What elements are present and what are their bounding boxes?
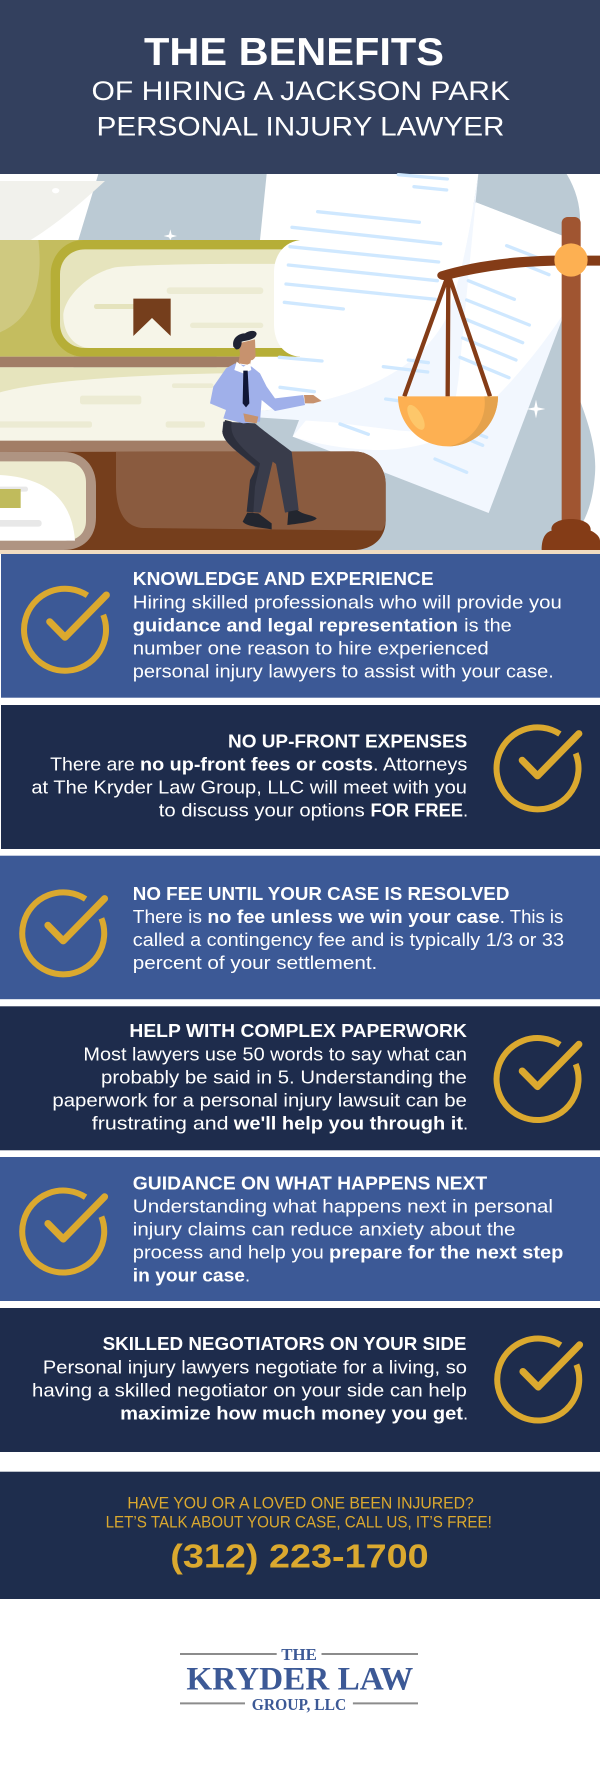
body text <box>133 906 564 973</box>
body text: in your case <box>133 1264 245 1285</box>
body text: is the <box>464 614 512 635</box>
body text: number one reason to hire experienced <box>133 637 489 658</box>
logo: The Kryder Law Group, LLC: THE <box>281 1645 317 1664</box>
body text: prepare for the next step <box>329 1241 563 1262</box>
body text: Personal injury lawyers negotiate for a living, so <box>43 1356 467 1377</box>
body text: probably be said in 5. Understanding the <box>101 1066 467 1087</box>
logo: The Kryder Law Group, LLC: KRYDER LAW <box>186 1661 413 1697</box>
title: OF HIRING A JACKSON PARK <box>92 76 510 106</box>
call to action panel <box>0 1472 600 1599</box>
document pages <box>217 174 567 513</box>
body text: having a skilled negotiator on your side can help <box>32 1379 467 1400</box>
title <box>92 31 510 142</box>
panel: help with complex paperwork <box>0 1006 600 1150</box>
body text: Understanding what happens next in personal <box>133 1195 553 1216</box>
heading: KNOWLEDGE AND EXPERIENCE <box>133 568 434 589</box>
body text <box>31 753 468 820</box>
heading: NO UP-FRONT EXPENSES <box>228 730 467 751</box>
icon: check circle <box>24 589 106 671</box>
body text: to discuss your options <box>159 799 365 820</box>
icon: check circle <box>497 727 579 809</box>
body text: called a contingency fee and is typically 1/3 or 33 <box>133 929 564 950</box>
phone number: (312) 223-1700 <box>170 1538 429 1575</box>
body text: . <box>463 1112 468 1133</box>
panel: skilled negotiators <box>0 1308 600 1452</box>
icon: check circle <box>22 1191 105 1273</box>
call to action text <box>106 1495 492 1532</box>
title: PERSONAL INJURY LAWYER <box>96 112 504 142</box>
body text: we'll help you through it <box>233 1112 463 1133</box>
icon: check circle <box>497 1339 580 1421</box>
top book <box>0 240 333 357</box>
body text: paperwork for a personal injury lawsuit can be <box>52 1089 467 1110</box>
middle book <box>0 357 267 452</box>
body text: There is <box>133 906 202 927</box>
body text: There are <box>50 753 135 774</box>
panel: no fee until resolved <box>0 856 600 999</box>
bottom book <box>0 451 386 550</box>
body text <box>52 1043 468 1133</box>
logo: The Kryder Law Group, LLC <box>180 1645 418 1714</box>
body text: . <box>245 1264 250 1285</box>
heading: NO FEE UNTIL YOUR CASE IS RESOLVED <box>133 883 509 904</box>
sparkles <box>164 229 545 418</box>
heading: SKILLED NEGOTIATORS ON YOUR SIDE <box>103 1333 466 1354</box>
heading: GUIDANCE ON WHAT HAPPENS NEXT <box>133 1172 488 1193</box>
body text: . <box>463 1402 468 1423</box>
scales of justice <box>398 217 600 550</box>
body text: . <box>463 799 468 820</box>
background blob <box>67 174 595 551</box>
call to action text: LET’S TALK ABOUT YOUR CASE, CALL US, IT’S FREE! <box>106 1514 492 1532</box>
body text <box>32 1356 468 1423</box>
body text: Most lawyers use 50 words to say what can <box>83 1043 467 1064</box>
body text: . This is <box>500 906 563 927</box>
torn page top left <box>0 181 105 240</box>
body text <box>133 591 562 681</box>
body text: no up-front fees or costs <box>140 753 373 774</box>
body text: process and help you <box>133 1241 324 1262</box>
body text: FOR FREE <box>370 799 463 820</box>
bookmark <box>133 299 171 336</box>
body text: Hiring skilled professionals who will provide you <box>133 591 562 612</box>
icon: check circle <box>497 1038 579 1120</box>
body text: at The Kryder Law Group, LLC will meet with you <box>31 776 467 797</box>
body text: percent of your settlement. <box>133 952 377 973</box>
call to action text: HAVE YOU OR A LOVED ONE BEEN INJURED? <box>127 1495 474 1513</box>
panel: guidance on what happens next <box>0 1157 600 1301</box>
body text: . Attorneys <box>373 753 467 774</box>
panel: knowledge and experience <box>1 554 600 698</box>
panel: no up-front expenses <box>1 705 600 849</box>
icon: check circle <box>22 892 105 974</box>
body text: injury claims can reduce anxiety about the <box>133 1218 516 1239</box>
title: THE BENEFITS <box>144 31 444 74</box>
body text <box>133 1195 563 1285</box>
logo: The Kryder Law Group, LLC: GROUP, LLC <box>252 1695 346 1714</box>
illustration: law books, lawyer and scales of justice <box>0 174 600 554</box>
lawyer figure <box>210 331 322 529</box>
body text: frustrating and <box>92 1112 228 1133</box>
body text: maximize how much money you get <box>120 1402 463 1423</box>
body text: no fee unless we win your case <box>207 906 500 927</box>
cream floor strip <box>0 550 600 554</box>
body text: guidance and legal representation <box>133 614 458 635</box>
heading: HELP WITH COMPLEX PAPERWORK <box>129 1020 468 1041</box>
header banner <box>0 0 600 174</box>
body text: personal injury lawyers to assist with your case. <box>133 660 554 681</box>
document text lines <box>279 175 549 472</box>
